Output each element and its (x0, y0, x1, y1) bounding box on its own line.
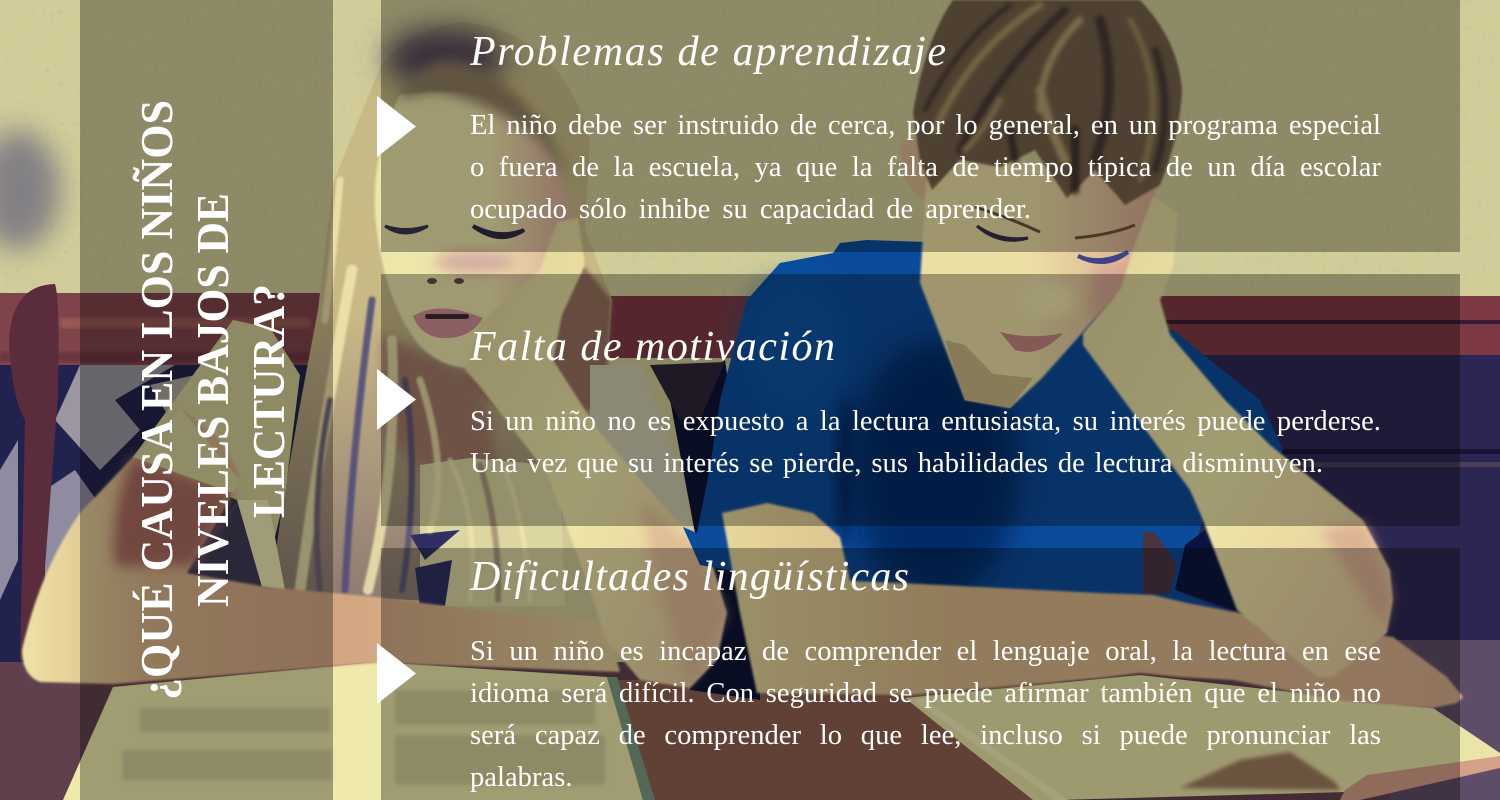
heading 1: Problemas de aprendizaje (469, 29, 946, 75)
panel: Problemas de aprendizaje (381, 0, 1460, 252)
body text 3 (470, 636, 1381, 793)
chair post (9, 284, 59, 660)
dark gap between arms (670, 360, 760, 700)
arrow icon 2 (377, 369, 416, 430)
table (0, 662, 1500, 800)
left title band (80, 0, 333, 800)
girl: arm on table (22, 408, 620, 684)
boy: hair (913, 0, 1182, 205)
heading 2: Falta de motivación (469, 324, 835, 370)
title: vertical heading: ¿QUÉ CAUSA EN LOS NIÑOS (131, 100, 182, 700)
right book (905, 675, 1500, 800)
body text 3: Si un niño es incapaz de comprender el lenguaje oral, la lectura en ese (470, 636, 1381, 667)
body text 2 (470, 406, 1381, 479)
girl: t-shirt (133, 320, 300, 587)
panel: Dificultades lingüísticas (381, 548, 1460, 800)
body text 3: idioma será difícil. Con seguridad se puede afirmar también que el niño no (470, 678, 1381, 709)
girl: hair (270, 22, 612, 606)
girl: face (375, 92, 570, 368)
boy: forearm on table (722, 503, 1463, 708)
wall (0, 0, 1500, 300)
body text 1: ocupado sólo inhibe su capacidad de aprender. (470, 194, 1031, 225)
body text 2: Una vez que su interés se pierde, sus habilidades de lectura disminuyen. (470, 448, 1323, 479)
chair cushion (0, 365, 320, 665)
panel: Falta de motivación (381, 274, 1460, 526)
girl: propping arm (465, 218, 727, 688)
body text 1: El niño debe ser instruido de cerca, por lo general, en un programa especial (470, 110, 1381, 141)
body text 1: o fuera de la escuela, ya que la falta de tiempo típica de un día escolar (470, 152, 1381, 183)
body text 3: palabras. (470, 762, 573, 793)
boy: blue shirt (683, 240, 1283, 615)
boy: ear (900, 139, 932, 200)
arrow icon 3 (377, 643, 416, 704)
boy: face and neck (920, 150, 1160, 408)
body text 2: Si un niño no es expuesto a la lectura entusiasta, su interés puede perderse. (470, 406, 1381, 437)
wooden rail left (0, 293, 340, 365)
girl: hair strands (300, 180, 530, 600)
heading 3: Dificultades lingüísticas (469, 554, 909, 600)
title: vertical heading (131, 100, 294, 700)
arrow icon 1 (377, 96, 416, 157)
dark bench right (1100, 355, 1500, 645)
boy: propping arm (1083, 197, 1393, 677)
wooden rail right (590, 296, 1500, 358)
body text 3: será capaz de comprender lo que lee, incluso si puede pronunciar las (470, 720, 1381, 751)
body text 1 (470, 110, 1381, 225)
left book (63, 662, 643, 800)
title: vertical heading: NIVELES BAJOS DE (187, 193, 238, 607)
title: vertical heading: LECTURA? (243, 284, 294, 518)
